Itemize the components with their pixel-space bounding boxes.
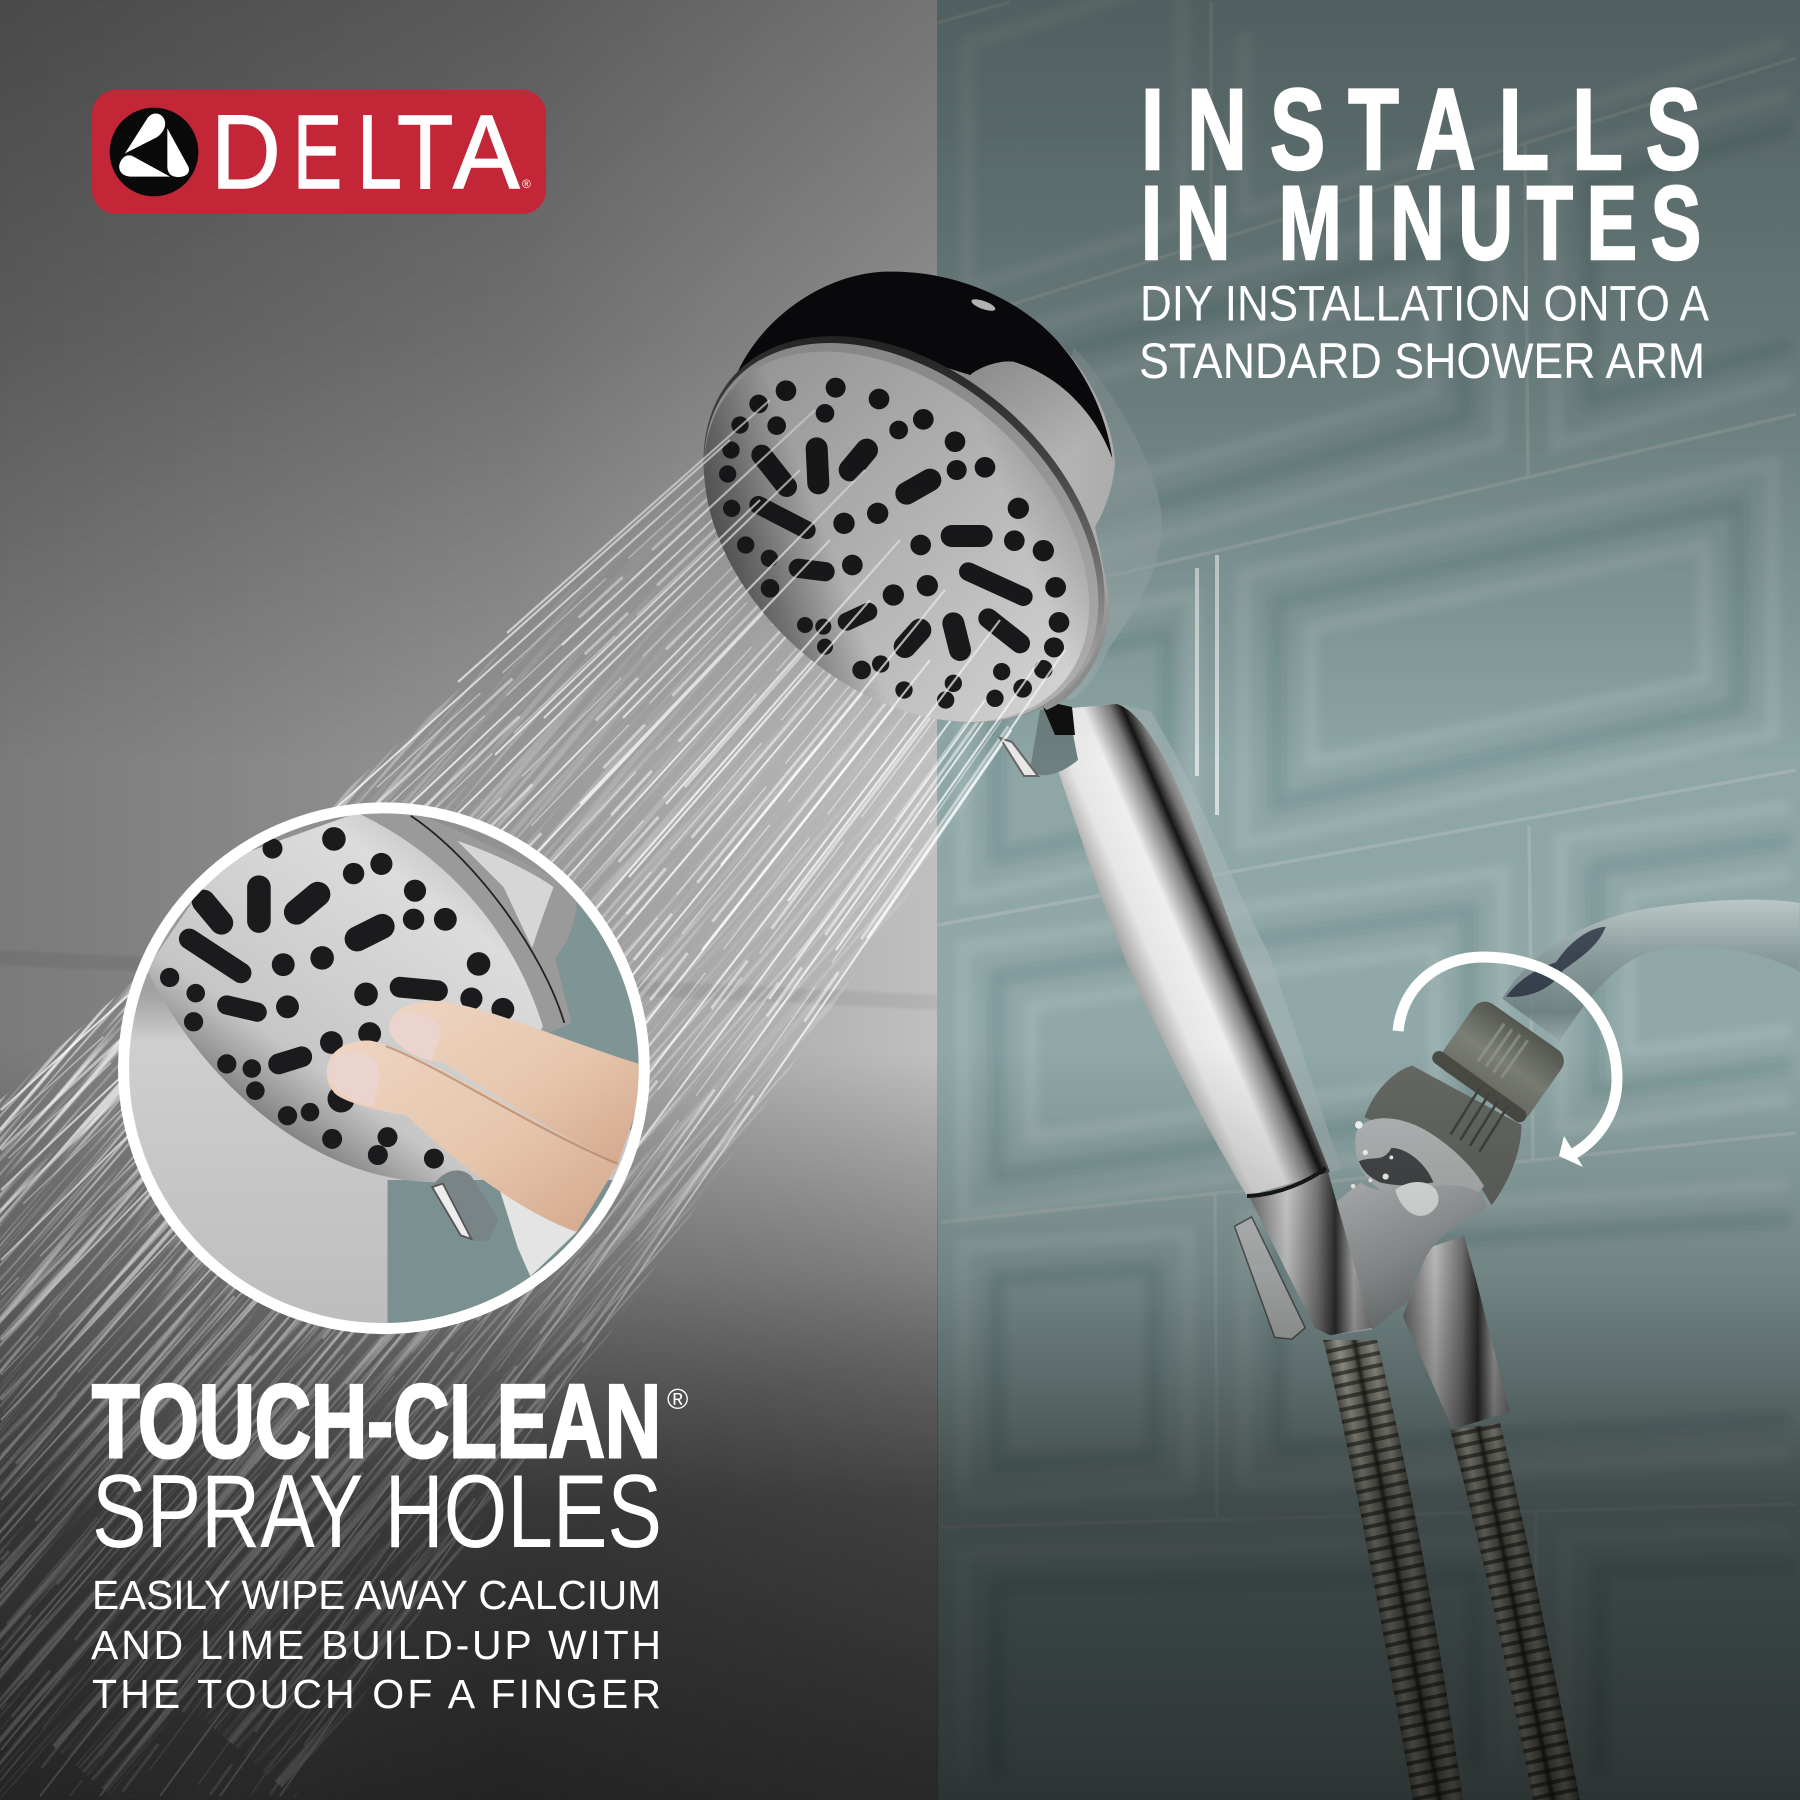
hand shower handle — [1057, 704, 1330, 1196]
inset white ring — [124, 808, 644, 1329]
chrome body — [735, 272, 1115, 710]
round spray holes — [719, 378, 1069, 709]
logo wordmark: A — [453, 93, 520, 211]
lower nut — [1365, 1066, 1521, 1205]
inset round holes — [160, 827, 514, 1169]
shower hose left — [1323, 1340, 1463, 1800]
inset teal wall — [388, 1180, 613, 1323]
registered mark: ® — [667, 1384, 688, 1416]
inset lever — [432, 1170, 498, 1241]
spray face — [632, 278, 1161, 796]
water spray — [0, 475, 1012, 1800]
bracket highlight — [1395, 1182, 1438, 1216]
logo wordmark: D — [211, 94, 281, 211]
body line one: EASILY WIPE AWAY CALCIUM — [92, 1572, 661, 1618]
water streams over head face — [458, 400, 1065, 999]
rim highlight — [630, 267, 1172, 798]
inset circle: finger wiping spray holes — [118, 801, 659, 1337]
tiled wall background — [937, 0, 1800, 1800]
ball reflections — [1359, 1148, 1433, 1185]
inset rim — [357, 812, 577, 1037]
mount bracket — [1301, 1182, 1487, 1335]
lower mount tube — [1403, 1236, 1510, 1429]
body line two: AND LIME BUILD-UP WITH — [91, 1622, 661, 1668]
upper nail — [389, 1012, 441, 1060]
light line: SPRAY HOLES — [92, 1454, 662, 1570]
logo wordmark: E — [293, 94, 342, 211]
inset content — [129, 814, 639, 1323]
body line three: THE TOUCH OF A FINGER — [92, 1671, 661, 1717]
inset rim dark edge — [411, 816, 564, 1023]
inset face — [146, 813, 543, 1184]
bold line: TOUCH-CLEAN — [92, 1364, 661, 1480]
heading: installs in minutes — [1139, 66, 1710, 389]
heading: touch-clean spray holes — [91, 1364, 688, 1717]
inset back highlight — [457, 841, 554, 948]
nut gap — [1439, 1058, 1520, 1115]
holder clip — [1234, 1217, 1305, 1339]
logo mark — [110, 108, 198, 196]
bottom shading — [0, 1050, 1800, 1800]
line two: IN MINUTES — [1141, 165, 1701, 282]
shower arm and wall mount — [1234, 900, 1800, 1429]
logo wordmark: L — [357, 93, 402, 210]
logo wordmark: T — [397, 92, 453, 210]
rim — [628, 258, 1180, 800]
swivel ball — [1355, 1118, 1484, 1204]
left wall background — [0, 0, 938, 1800]
black dome reflection — [735, 272, 1112, 458]
bracket side — [1301, 1221, 1372, 1335]
sparkles — [1351, 1121, 1393, 1188]
logo badge — [92, 90, 546, 214]
inset wall right — [549, 902, 639, 1131]
grout lines — [937, 2, 1796, 1795]
lower nail — [327, 1051, 379, 1106]
logo wordmark — [211, 92, 520, 211]
tile bevel relief — [963, 0, 1790, 1776]
handle lower tube — [1250, 1173, 1372, 1335]
subtitle line two: STANDARD SHOWER ARM — [1139, 333, 1705, 389]
line one: INSTALLS — [1141, 66, 1701, 194]
lower left wall shading — [0, 1050, 938, 1800]
lower nut ribs — [1451, 1089, 1508, 1152]
finger crease — [386, 1046, 618, 1164]
top shading — [0, 0, 1800, 760]
upper nut — [1434, 996, 1569, 1125]
registered mark: ® — [522, 177, 531, 191]
slot spray holes — [758, 448, 1023, 650]
inset handle — [500, 1191, 577, 1276]
shower hose right — [1450, 1423, 1580, 1800]
inset slot holes — [189, 887, 437, 1064]
head translucent back — [1030, 347, 1162, 700]
shower arm — [1502, 900, 1800, 1041]
upper finger — [389, 1001, 639, 1164]
handle ring — [1247, 1168, 1326, 1196]
rotation arrow — [1398, 957, 1617, 1167]
handle translucent reflection — [1117, 704, 1342, 1172]
subtitle line one: DIY INSTALLATION ONTO A — [1140, 276, 1710, 332]
lower finger — [327, 1041, 618, 1232]
dome highlight — [970, 297, 997, 313]
shower head — [628, 258, 1180, 800]
arm reflection — [1506, 927, 1606, 997]
Delta logo — [92, 90, 546, 214]
lever under head — [1000, 700, 1078, 776]
